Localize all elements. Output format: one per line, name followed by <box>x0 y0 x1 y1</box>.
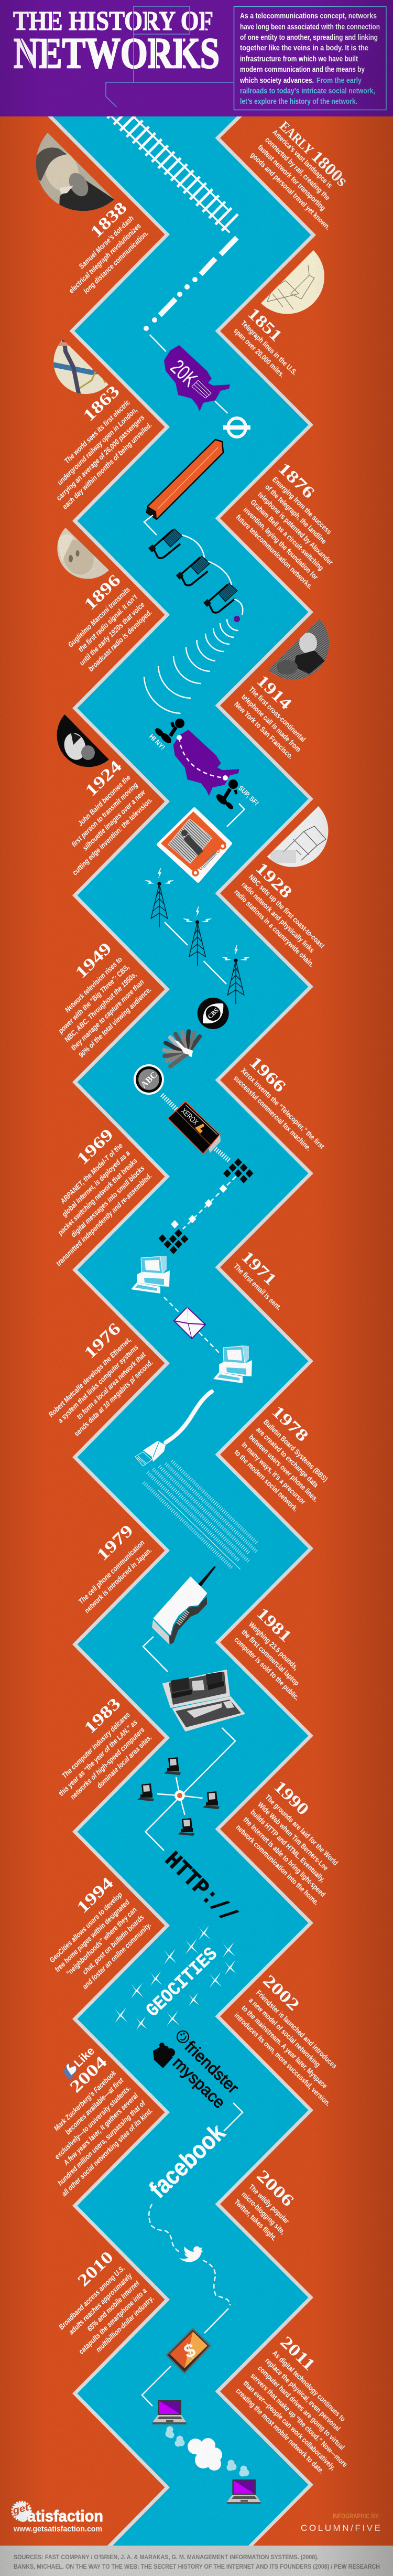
panel: 1979 <box>75 1521 154 1615</box>
text: 1990 description <box>234 1793 350 1907</box>
panel: 1969 <box>25 1125 154 1268</box>
text: 1983 description: networks of high-speed computers <box>69 1725 146 1801</box>
panel: 2010 <box>55 2247 156 2363</box>
arrow: facebook dashed trail to twitter <box>149 2204 179 2252</box>
year: 1976: 1976 <box>80 1319 124 1362</box>
arrow: twitter to tablet <box>204 2308 228 2333</box>
panel: 1981 <box>233 1604 316 1702</box>
icon: CBS logo <box>191 991 235 1035</box>
text: 2002 description: a new model of social networking <box>247 1996 322 2069</box>
year: 1914: 1914 <box>253 671 296 713</box>
year: 1981: 1981 <box>253 1604 296 1645</box>
text: 1876 description: future telecommunication networks. <box>234 512 314 591</box>
text: intro paragraph: which society advances. <box>239 77 314 85</box>
panel: 1876 <box>234 458 351 591</box>
text: early 1800s description: fastest network for transporting <box>256 143 328 212</box>
icon: small clouds left <box>166 2427 184 2446</box>
year: early 1800s: EARLY <box>277 118 316 158</box>
icon: laptop two <box>227 2479 261 2504</box>
photo: John Baird <box>52 711 113 771</box>
icon: packet cluster top <box>223 1158 254 1183</box>
text: 1876 description: Graham Bell as a circuit-switching <box>249 498 325 572</box>
panel: purple header <box>0 0 393 116</box>
text: 1966 description: Xerox invents the “Telecopier,” the first <box>239 1066 326 1151</box>
icon: small computer bottom <box>178 1818 194 1836</box>
text: GeoCities logo: GEOCITIES <box>142 1943 222 2022</box>
icon: small computer left <box>137 1783 154 1801</box>
text: 2004 description: A few years later, it gathers several <box>61 2091 140 2167</box>
icon: US map 20K miles: 20K <box>166 356 202 391</box>
text: 1914 description: New York to San Francisco. <box>233 700 295 761</box>
text: early 1800s description: America’s vast landsapce is <box>271 128 334 189</box>
icon: Xerox fax machine: XEROX <box>179 1107 200 1127</box>
text: 1978 description: Bulletin Board Systems (BBS) <box>262 1418 330 1483</box>
text: sources line 1: SOURCES: FAST COMPANY / O’BRIEN, J. A. & MARAKAS, G. M. MANAGEMENT INFORMATION SYSTEMS. (2008). <box>14 2554 319 2561</box>
icon: packet cluster bottom <box>158 1229 189 1254</box>
panel: 1914 <box>233 616 333 761</box>
year: 1838: 1838 <box>86 198 130 241</box>
text: 2004 description: Mark Zuckerberg’s Facebook <box>52 2068 118 2133</box>
text: 1978 description: to the modern social network. <box>233 1448 300 1513</box>
text: 1914 description: The first cross-continental <box>247 685 308 743</box>
text: intro paragraph: modern communication and the means by <box>240 66 365 74</box>
text: 2006 description: Twitter, takes flight. <box>233 2197 279 2242</box>
arrow: laptop through LAN hub to HTTP <box>146 1728 235 1851</box>
text: 1990 description: network communication into the home. <box>234 1823 321 1907</box>
text: 2011 description: computer hard drives are going to virtual <box>256 2364 346 2452</box>
text: 2011 description: than ever—people can work collaboratively, <box>242 2379 337 2472</box>
text: 1969 description: digital messages into small blocks <box>69 1164 146 1239</box>
year: 1990: 1990 <box>270 1777 313 1819</box>
panel: 1851 <box>234 250 325 378</box>
panel: 2002 <box>233 1971 354 2108</box>
text: 1978 description: between users over phone lines. <box>247 1433 320 1503</box>
text: 1838 description <box>60 213 150 303</box>
icon: candlestick phone NY <box>154 719 184 745</box>
text: 1983 description: The computer industry delcares <box>60 1711 132 1780</box>
icon: laptop one <box>152 2400 187 2424</box>
arrow: dashed line to envelope <box>164 1297 179 1312</box>
text: 2011 description <box>234 2349 371 2484</box>
year: 2010: 2010 <box>73 2247 117 2290</box>
text: 1914 description <box>233 685 310 761</box>
panel: 1949 <box>47 938 153 1060</box>
icon: bulletin board text pattern <box>140 1455 263 1574</box>
year: 1971: 1971 <box>238 1247 280 1289</box>
text: 1876 description: telephone is patented by Alexander <box>256 490 335 566</box>
title: The History of Networks: NETWORKS <box>14 29 220 77</box>
text: 1994 description: “neighborhoods” where they can <box>64 1905 138 1978</box>
text: 1983 description <box>49 1711 154 1813</box>
text: 2006 description: micro-blogging site, <box>240 2190 287 2236</box>
text: 1838 description: long distance communication. <box>82 229 150 295</box>
text: 1863 description: carrying an average of 26,000 passengers <box>54 413 146 502</box>
year: 1863: 1863 <box>79 381 123 425</box>
icon: radio transmitter with waves <box>144 616 240 713</box>
text: 1978 description <box>233 1418 335 1519</box>
text: 1981 description <box>233 1620 316 1702</box>
text: 2004 description: hundred million users, surpassing that of <box>56 2098 147 2187</box>
text: 1983 description: this year as “the year of the LAN,” as <box>57 1718 139 1798</box>
year: 1949: 1949 <box>71 938 115 982</box>
text: 1914 description: telephone call is made from <box>240 692 303 754</box>
text: 1924 description: first person to transmit moving <box>70 781 139 849</box>
arrow: twitter dashed trail to tablet <box>203 2260 230 2305</box>
text: 1896 description: the first radio signal. It isn’t <box>77 592 139 654</box>
text: 1971 description: The first email is sent. <box>232 1262 283 1312</box>
icon: television <box>158 809 231 881</box>
icon: telephone switch 2 <box>176 556 210 585</box>
logo: Get Satisfaction: get <box>11 2502 30 2517</box>
panel: 1896 <box>55 525 154 675</box>
text: 1924 description: silhouette images over a new <box>81 788 147 852</box>
icon: NBC peacock <box>164 1031 200 1066</box>
text: 1979 description: The cell phone communication <box>77 1538 146 1606</box>
text: 1949 description: 90% of the total viewing audience. <box>77 985 153 1059</box>
icon: US map 20K miles <box>164 345 230 411</box>
text: 1969 description: transmitted independently and re-assembled. <box>54 1171 154 1268</box>
text: 1924 description: cutting edge invention: the television. <box>70 796 154 877</box>
arrow: map to underground <box>215 401 227 413</box>
label: SUP SF: SUP, SF! <box>237 784 260 807</box>
text: 1924 description: John Baird becomes the <box>76 773 132 828</box>
text: intro paragraph: together like the veins in a body. It is the <box>240 44 368 52</box>
year: 1979: 1979 <box>93 1521 137 1564</box>
text: 1876 description <box>234 475 351 591</box>
logo: Column Five: COLUMN/FIVE <box>301 2523 380 2533</box>
text: 1990 description: builds HTTP and HTML. Eventually, <box>249 1808 327 1884</box>
year: 1896: 1896 <box>80 570 124 614</box>
panel: 1838 <box>36 133 148 294</box>
text: 1966 description: successful commercial fax machine. <box>232 1074 313 1152</box>
label: HI NY: HI NY! <box>148 732 167 751</box>
text: 1994 description: chat, post on bulletin boards <box>81 1913 146 1976</box>
text: 1994 description: and foster an online community. <box>81 1920 153 1991</box>
text: 2002 description: to the mainstream. A year later, Myspace <box>240 2003 329 2090</box>
text: intro paragraph: let’s explore the history of the network. <box>240 98 357 106</box>
year: 1876: 1876 <box>275 458 319 502</box>
icon: like thumb <box>63 2063 77 2080</box>
text: 2002 description: introduces its own, more successful, version. <box>233 2011 332 2108</box>
text: 2010 description: multibillion-dollar industry. <box>94 2294 156 2354</box>
text: 1863 description: The world sees its first electric <box>62 398 132 465</box>
year: 1851: 1851 <box>244 304 286 345</box>
icon: Osborne portable computer <box>163 1670 244 1731</box>
text: 1949 description: NBC, ABC. Throughout the 1950s, <box>63 970 138 1044</box>
text: 1863 description: underground railway open in London, <box>56 405 139 487</box>
text: 1924 description <box>49 773 155 877</box>
panel: 1976 <box>47 1319 155 1441</box>
icon: radio tower 1 <box>145 868 174 927</box>
year: 2011: 2011 <box>277 2332 319 2374</box>
arrow: tablet to laptop <box>142 2366 171 2406</box>
icon: desktop computer sender <box>131 1256 170 1294</box>
icon: ABC logo <box>127 1058 170 1101</box>
text: 1949 description <box>47 955 153 1060</box>
icon: brick cell phone <box>152 1566 216 1644</box>
text: 1969 description: global Internet, is deployed as a <box>60 1149 132 1218</box>
arrow: dashed line to computer <box>199 1332 221 1354</box>
photo: telegraph key engraving <box>261 250 325 314</box>
text: 1863 description <box>39 398 154 511</box>
text: 2006 description: The wildly popular <box>247 2183 291 2225</box>
panel: 1863 <box>53 339 152 509</box>
panel: early 1800s <box>249 116 354 231</box>
text: 2004 description: becomes available—at first <box>63 2076 125 2136</box>
text: 1949 description: they manage to capture more than <box>69 978 146 1052</box>
icon: tablet with dollar sign: $ <box>181 2339 198 2363</box>
year: 1924: 1924 <box>81 756 125 800</box>
panel: 1990 <box>234 1777 350 1907</box>
icon: Xerox fax machine <box>168 1102 221 1154</box>
year: early 1800s: 1800s <box>308 146 352 190</box>
icon: radio tower 2 <box>183 906 212 966</box>
icon: small computer right <box>203 1791 220 1809</box>
icon: telephone switch 1 <box>148 529 182 558</box>
icon: fax spring 2 <box>215 1149 230 1161</box>
text: 1978 description: are created to exchange data <box>255 1425 321 1489</box>
text: 1990 description: The grounds are laid for the World <box>264 1793 340 1867</box>
panel: 2006 <box>233 2166 298 2243</box>
panel: intro text box <box>234 6 386 110</box>
panel: 1978 <box>233 1402 335 1519</box>
text: 1981 description: Weighing 23.5 pounds, <box>247 1620 300 1672</box>
text: 1928 description: radio stations in a countrywide chain. <box>233 888 316 969</box>
text: 1976 description <box>47 1335 155 1441</box>
text: 1876 description: invention, laying the foundation for <box>242 505 320 581</box>
panel: 2004 <box>24 2044 155 2198</box>
icon: myspace figures <box>153 2043 175 2068</box>
text: 1949 description: power with the “Big Three”: CBS, <box>56 963 131 1035</box>
text: intro paragraph: infrastructure from which we have built <box>240 55 358 63</box>
icon: small computer top <box>164 1757 181 1775</box>
text: 1928 description: radio network and physically links <box>240 880 316 955</box>
icon: london underground roundel <box>223 418 250 437</box>
text: infographic by: INFOGRAPHIC BY: <box>333 2512 380 2520</box>
text: 1876 description: of the telegraph, the landline <box>264 483 329 546</box>
icon: candlestick phone SF <box>215 779 238 810</box>
arrow: tower links <box>165 922 226 984</box>
text: 1990 description: Wide Web when Tim Berners-Lee <box>256 1800 330 1872</box>
year: 2004: 2004 <box>66 2052 111 2096</box>
icon: LAN hub with computers <box>137 1757 220 1836</box>
photo: Bell engraving <box>265 616 333 685</box>
arrow: phone to television <box>227 804 244 827</box>
panel: 1924 <box>49 711 155 877</box>
text: 1969 description <box>25 1141 154 1268</box>
text: myspace logo: myspace <box>169 2054 229 2112</box>
text: 1896 description <box>63 585 154 675</box>
text: 1896 description: until the early 1920s that voice <box>78 600 146 667</box>
text: 2006 description <box>233 2183 294 2243</box>
text: Like: Like <box>71 2044 97 2070</box>
text: 1994 description: free home pages within designated <box>53 1897 132 1974</box>
text: website address: www.getsatisfaction.com <box>13 2525 102 2534</box>
arrow: tunnel to telephone <box>144 515 157 535</box>
text: early 1800s description: goods and personal travel yet known. <box>249 151 332 231</box>
year: 1994: 1994 <box>73 1873 117 1917</box>
panel: 1928 <box>233 803 333 969</box>
icon: telephone switch 3 <box>203 583 237 613</box>
arrow: thin connector lines <box>106 6 234 107</box>
text: 2011 description: servers that make up “the cloud.” Now—more <box>249 2371 350 2469</box>
teal zigzag timeline path <box>52 116 311 2546</box>
photo: Guglielmo Marconi <box>55 525 113 582</box>
text: early 1800s description <box>249 128 354 231</box>
panel: 2011 <box>234 2332 371 2484</box>
icon: fax spring 1 <box>162 1095 177 1109</box>
icon: email envelope <box>174 1307 205 1339</box>
icon: central cloud <box>188 2438 222 2471</box>
text: 2010 description <box>55 2263 156 2363</box>
text: 1979 description: network is introduced in Japan. <box>82 1546 154 1615</box>
text: friendster logo: friendster <box>181 2037 243 2097</box>
year: 1928: 1928 <box>252 858 296 902</box>
icon: CBS logo: CBS <box>206 1007 220 1020</box>
photo: early television sketch <box>265 803 333 871</box>
text: 1896 description: Guglielmo Marconi transmits <box>66 585 132 649</box>
title: The History of Networks: THE HISTORY OF <box>13 6 213 36</box>
arrow: phone to laptop <box>143 1637 168 1672</box>
year: 2002: 2002 <box>259 1971 303 2014</box>
text: 1969 description: packet switching network that breaks <box>56 1156 139 1237</box>
icon: twitter bird <box>179 2246 203 2262</box>
year: 1978: 1978 <box>268 1402 312 1445</box>
text: 1976 description: sends data at 10 megabits p/ second. <box>72 1358 155 1438</box>
text: 2010 description: 65% and mobile Internet <box>85 2279 141 2333</box>
text: 2004 description <box>24 2068 155 2198</box>
icon: radio tower 3 <box>221 945 250 1004</box>
text: 1838 description: Samuel Morse’s dot-dash <box>77 213 135 271</box>
text: 1976 description: Robert Metcalfe develops the Ethernet, <box>47 1335 133 1419</box>
icon: GeoCities stars <box>115 1926 236 2030</box>
text: 2011 description: replace the physical, even personal <box>264 2356 342 2433</box>
year: 1969: 1969 <box>73 1125 117 1168</box>
text: 1981 description: computer is sold to the public. <box>233 1635 301 1702</box>
photo: Samuel Morse <box>36 133 114 211</box>
year: early 1800s <box>276 116 352 190</box>
text: 2011 description: creating the most mobile network to date. <box>234 2386 326 2475</box>
title: The History of Networks <box>13 6 220 77</box>
icon: tablet with dollar sign <box>167 2329 210 2373</box>
logo: Get Satisfaction: satisfaction <box>19 2507 103 2525</box>
panel: 1983 <box>49 1694 154 1813</box>
icon: morse code dots and dashes <box>144 238 237 330</box>
text: 1851 description: Telegraph lines in the U.S. <box>239 319 299 377</box>
year: 1966: 1966 <box>246 1052 290 1096</box>
icon: ABC logo: ABC <box>139 1070 159 1090</box>
icon: ethernet cable <box>135 1392 212 1466</box>
icon: US map with phone route <box>173 730 239 796</box>
text: 1978 description: In many ways, it’s a precursor <box>240 1440 308 1506</box>
text: 1896 description: broadcast radio is developed. <box>86 608 154 673</box>
panel: 1966 <box>232 1052 326 1158</box>
text: intro paragraph: From the early <box>316 77 362 85</box>
text: 1851 description: span over 20,000 miles. <box>232 326 286 379</box>
text: 2011 description: As digital technology continues to <box>271 2349 347 2423</box>
icon: friendster smile <box>177 2031 189 2043</box>
text: 1981 description: the first commercial laptop <box>240 1628 301 1687</box>
text: 2010 description: Broadband access among U.S. <box>57 2264 126 2331</box>
icon: telephone switches chain <box>148 529 243 615</box>
icon: underground tunnel <box>147 440 223 519</box>
icon: small clouds right <box>226 2460 249 2477</box>
text: 2002 description: Friendster is launched and introduces <box>255 1989 339 2070</box>
text: 2002 description <box>233 1989 354 2108</box>
text: 1863 description: each day within months of being unveiled. <box>61 421 154 511</box>
panel: 1971 <box>232 1247 283 1312</box>
photo: London underground map <box>53 339 108 394</box>
text: early 1800s description: connected by rail, creating the <box>264 135 332 202</box>
text: 2004 description: exclusively—to university students. <box>53 2083 133 2161</box>
text: 1990 description: the Internet is able to bring light-speed <box>242 1815 328 1899</box>
year: 1983: 1983 <box>80 1694 124 1737</box>
text: 1876 description: Emerging from the success <box>271 475 333 536</box>
year: 2006: 2006 <box>253 2166 298 2210</box>
icon: railroad track <box>96 91 241 232</box>
text: 1928 description: NBC sets up the first coast-to-coast <box>247 873 327 950</box>
icon: packet switching link <box>171 1177 236 1229</box>
text: 2010 description: catapults the smartphone into a <box>77 2286 148 2356</box>
panel: sources footer <box>0 2546 393 2576</box>
text: 1976 description: a system that links computer systems <box>56 1343 140 1425</box>
icon: desktop computer receiver <box>213 1345 252 1383</box>
text: facebook logo: facebook <box>144 2118 231 2203</box>
text: 2004 description: all other social networking sites of its kind. <box>60 2106 154 2198</box>
arrow: myspace to facebook <box>224 2103 243 2131</box>
arrow: morse to map <box>150 335 166 351</box>
arrow: curved wires between switches <box>182 535 243 615</box>
text: 1994 description <box>46 1890 154 1996</box>
text: 1983 description: dominate local area sites. <box>95 1733 154 1790</box>
text: 1994 description: GeoCities allows users to develop <box>48 1890 124 1964</box>
text: 1949 description: Network television rises to <box>63 955 124 1014</box>
arrow: hub spokes <box>157 1777 203 1815</box>
white zigzag border of the path <box>48 116 316 2546</box>
text: HTTP protocol: HTTP:// <box>159 1847 241 1930</box>
text: intro paragraph <box>239 12 380 106</box>
text: 1976 description: to form a local area network that <box>75 1350 148 1421</box>
text: 1838 description: electrical telegraph revolutionizes <box>67 221 143 295</box>
text: 1969 description: ARPANET, the Model-T of the <box>58 1141 124 1205</box>
logo: Get Satisfaction <box>11 2502 103 2525</box>
panel: 1994 <box>46 1873 154 1996</box>
text: 2010 description: adults reaches approximately <box>67 2271 134 2336</box>
